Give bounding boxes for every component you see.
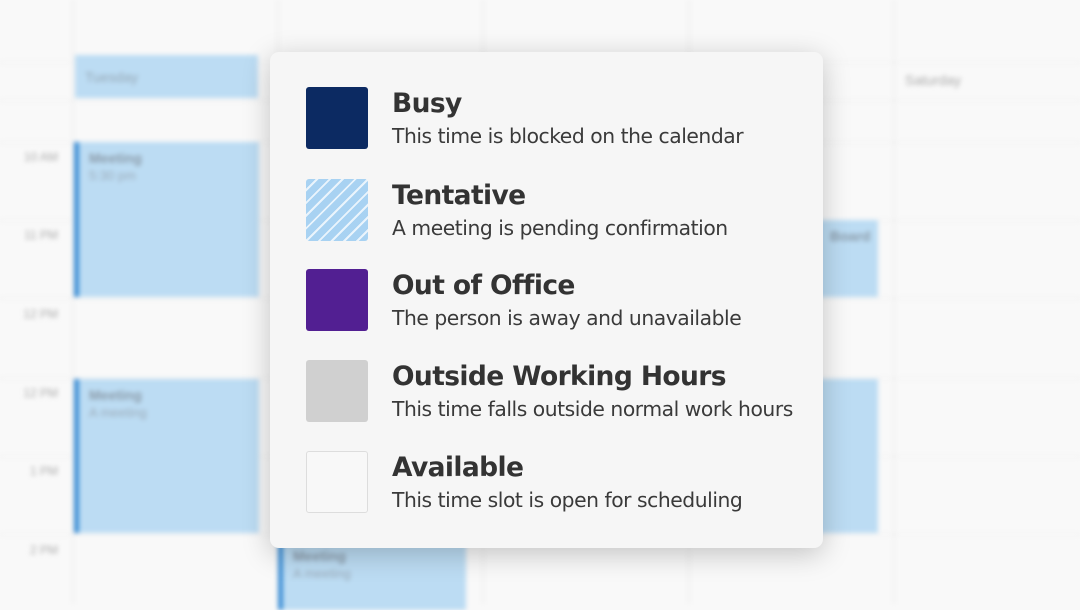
row: outside working hours: Outside Working Hours bbox=[392, 361, 726, 392]
row: tentative: A meeting is pending confirmation bbox=[392, 216, 728, 240]
row: tentative: Tentative bbox=[392, 180, 526, 211]
row: busy bbox=[306, 87, 744, 149]
row: out of office bbox=[306, 269, 741, 331]
row: tentative bbox=[306, 179, 728, 241]
row: available: This time slot is open for scheduling bbox=[392, 488, 742, 512]
blurred calendar background: 12 PM bbox=[23, 307, 58, 321]
blurred calendar background: Saturday bbox=[905, 72, 961, 88]
row: outside working hours: This time falls outside normal work hours bbox=[392, 397, 793, 421]
blurred calendar background: 5:30 pm bbox=[89, 168, 136, 183]
row: available: Available bbox=[392, 452, 523, 483]
blurred calendar background: A meeting bbox=[293, 566, 351, 581]
blurred calendar background: 11 PM bbox=[24, 228, 58, 242]
blurred calendar background: Meeting bbox=[293, 548, 346, 564]
blurred calendar background: Board bbox=[830, 228, 870, 244]
blurred calendar background: Tuesday bbox=[85, 69, 138, 85]
blurred calendar background: 12 PM bbox=[23, 386, 58, 400]
row: available bbox=[306, 451, 742, 513]
blurred calendar background: A meeting bbox=[89, 405, 147, 420]
blurred calendar background: 1 PM bbox=[30, 464, 58, 478]
row: busy: This time is blocked on the calendar bbox=[392, 124, 743, 148]
panel: legend bbox=[270, 52, 823, 548]
row: outside working hours bbox=[306, 360, 793, 422]
blurred calendar background: 10 AM bbox=[24, 150, 58, 164]
blurred calendar background: Meeting bbox=[89, 387, 142, 403]
row: out of office: Out of Office bbox=[392, 270, 575, 301]
blurred calendar background: Meeting bbox=[89, 150, 142, 166]
row: busy: Busy bbox=[392, 88, 462, 119]
row: out of office: The person is away and unavailable bbox=[392, 306, 741, 330]
blurred calendar background: 2 PM bbox=[30, 543, 58, 557]
